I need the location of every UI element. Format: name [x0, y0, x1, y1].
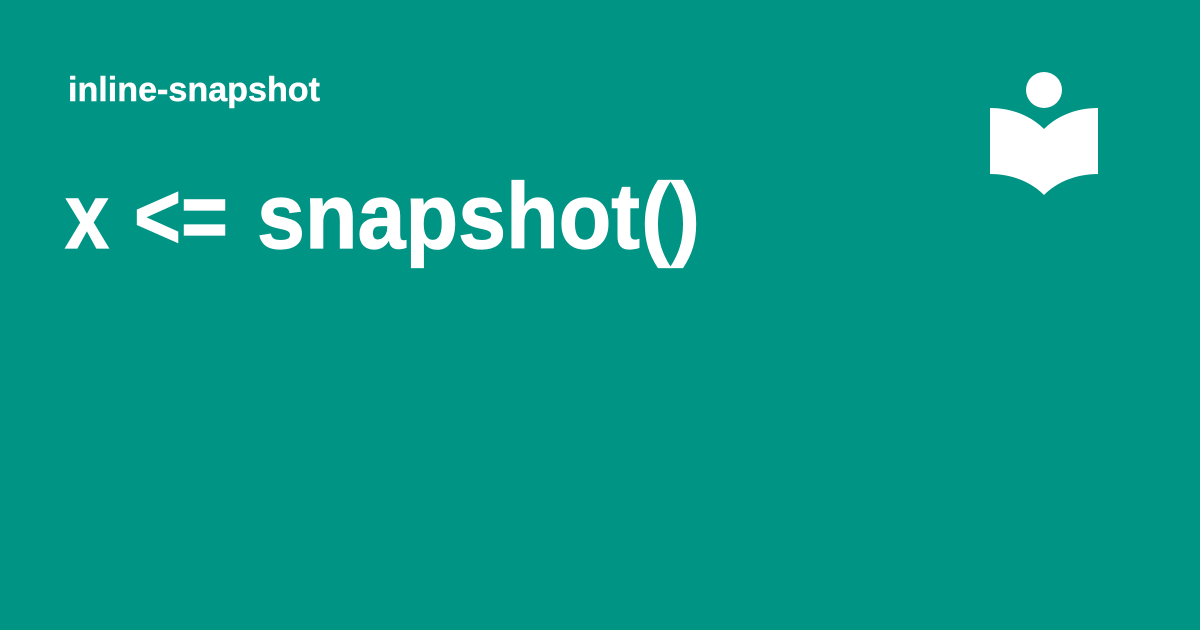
page title: x [65, 164, 109, 268]
site name: inline-snapshot [68, 71, 320, 109]
page title: () [641, 164, 700, 268]
page title: <= [134, 164, 228, 268]
icon: reader with open book [990, 72, 1098, 195]
page title [65, 164, 700, 268]
page title: snapshot [257, 164, 640, 268]
